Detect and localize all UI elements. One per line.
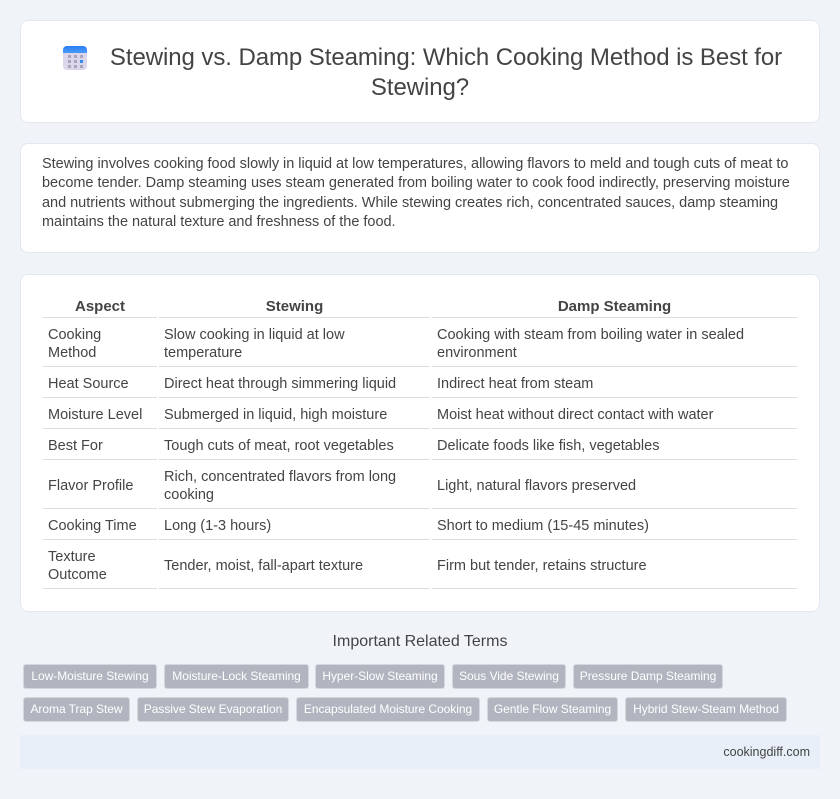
comparison table: Cooking [48, 327, 101, 343]
tag [137, 697, 289, 722]
panel: intro text [20, 143, 820, 253]
footer bar [20, 735, 820, 769]
tag [23, 664, 157, 689]
tag [625, 697, 787, 722]
tag [452, 664, 566, 689]
tag: Pressure Damp Steaming [580, 669, 716, 683]
tag: Aroma Trap Stew [30, 702, 123, 716]
title: Stewing vs. Damp Steaming: Which Cooking Method is Best for [110, 44, 782, 71]
comparison table: environment [437, 345, 517, 361]
intro paragraph: maintains the natural texture and freshness of the food. [42, 214, 396, 230]
panel: title header [20, 20, 820, 123]
tag [487, 697, 618, 722]
comparison table: Rich, concentrated flavors from long [164, 469, 396, 485]
tag: Moisture-Lock Steaming [172, 669, 301, 683]
comparison table: Aspect [75, 298, 125, 315]
comparison table: Tender, moist, fall-apart texture [164, 558, 363, 574]
title: Stewing? [371, 74, 469, 101]
comparison table: Moisture Level [48, 407, 142, 423]
comparison table: Delicate foods like fish, vegetables [437, 438, 659, 454]
intro paragraph: and nutrients without submerging the ingredients. While stewing creates rich, concentrated sauces, damp steaming [42, 195, 778, 211]
tag [573, 664, 723, 689]
tag [164, 664, 309, 689]
footer source: cookingdiff.com [723, 745, 810, 759]
comparison table: Slow cooking in liquid at low [164, 327, 345, 343]
comparison table: Flavor Profile [48, 478, 133, 494]
comparison table: Texture [48, 549, 96, 565]
tag: Low-Moisture Stewing [31, 669, 149, 683]
intro paragraph: become tender. Damp steaming uses steam generated from boiling water to cook food indirectly, preserving moisture [42, 175, 790, 191]
comparison table: Submerged in liquid, high moisture [164, 407, 387, 423]
tag: Encapsulated Moisture Cooking [304, 702, 472, 716]
comparison table: Tough cuts of meat, root vegetables [164, 438, 394, 454]
comparison table: Short to medium (15-45 minutes) [437, 518, 649, 534]
comparison table: Best For [48, 438, 103, 454]
comparison table: Method [48, 345, 96, 361]
comparison table: Moist heat without direct contact with water [437, 407, 713, 423]
tag: Sous Vide Stewing [459, 669, 559, 683]
comparison table: Cooking with steam from boiling water in sealed [437, 327, 744, 343]
tag: Hyper-Slow Steaming [322, 669, 438, 683]
related term tags [23, 664, 787, 722]
comparison table: Long (1-3 hours) [164, 518, 271, 534]
intro paragraph: Stewing involves cooking food slowly in liquid at low temperatures, allowing flavors to meld and tough cuts of meat to [42, 156, 788, 172]
comparison table: Light, natural flavors preserved [437, 478, 636, 494]
tag [315, 664, 445, 689]
comparison table [43, 298, 797, 589]
comparison table: Heat Source [48, 376, 129, 392]
tag: Gentle Flow Steaming [494, 702, 611, 716]
tag: Hybrid Stew-Steam Method [633, 702, 779, 716]
comparison table: Outcome [48, 567, 107, 583]
comparison table: temperature [164, 345, 242, 361]
comparison table: Damp Steaming [558, 298, 671, 315]
comparison table: Firm but tender, retains structure [437, 558, 647, 574]
title [110, 44, 782, 101]
tag [23, 697, 130, 722]
comparison table: Stewing [266, 298, 323, 315]
comparison table: Direct heat through simmering liquid [164, 376, 396, 392]
heading: related terms: Important Related Terms [333, 633, 507, 650]
comparison table: cooking [164, 487, 214, 503]
tag: Passive Stew Evaporation [144, 702, 282, 716]
comparison table: Cooking Time [48, 518, 137, 534]
panel: comparison table [20, 274, 820, 612]
comparison table: Indirect heat from steam [437, 376, 593, 392]
tag [296, 697, 480, 722]
intro paragraph [42, 156, 790, 230]
icon: calendar [63, 46, 87, 70]
